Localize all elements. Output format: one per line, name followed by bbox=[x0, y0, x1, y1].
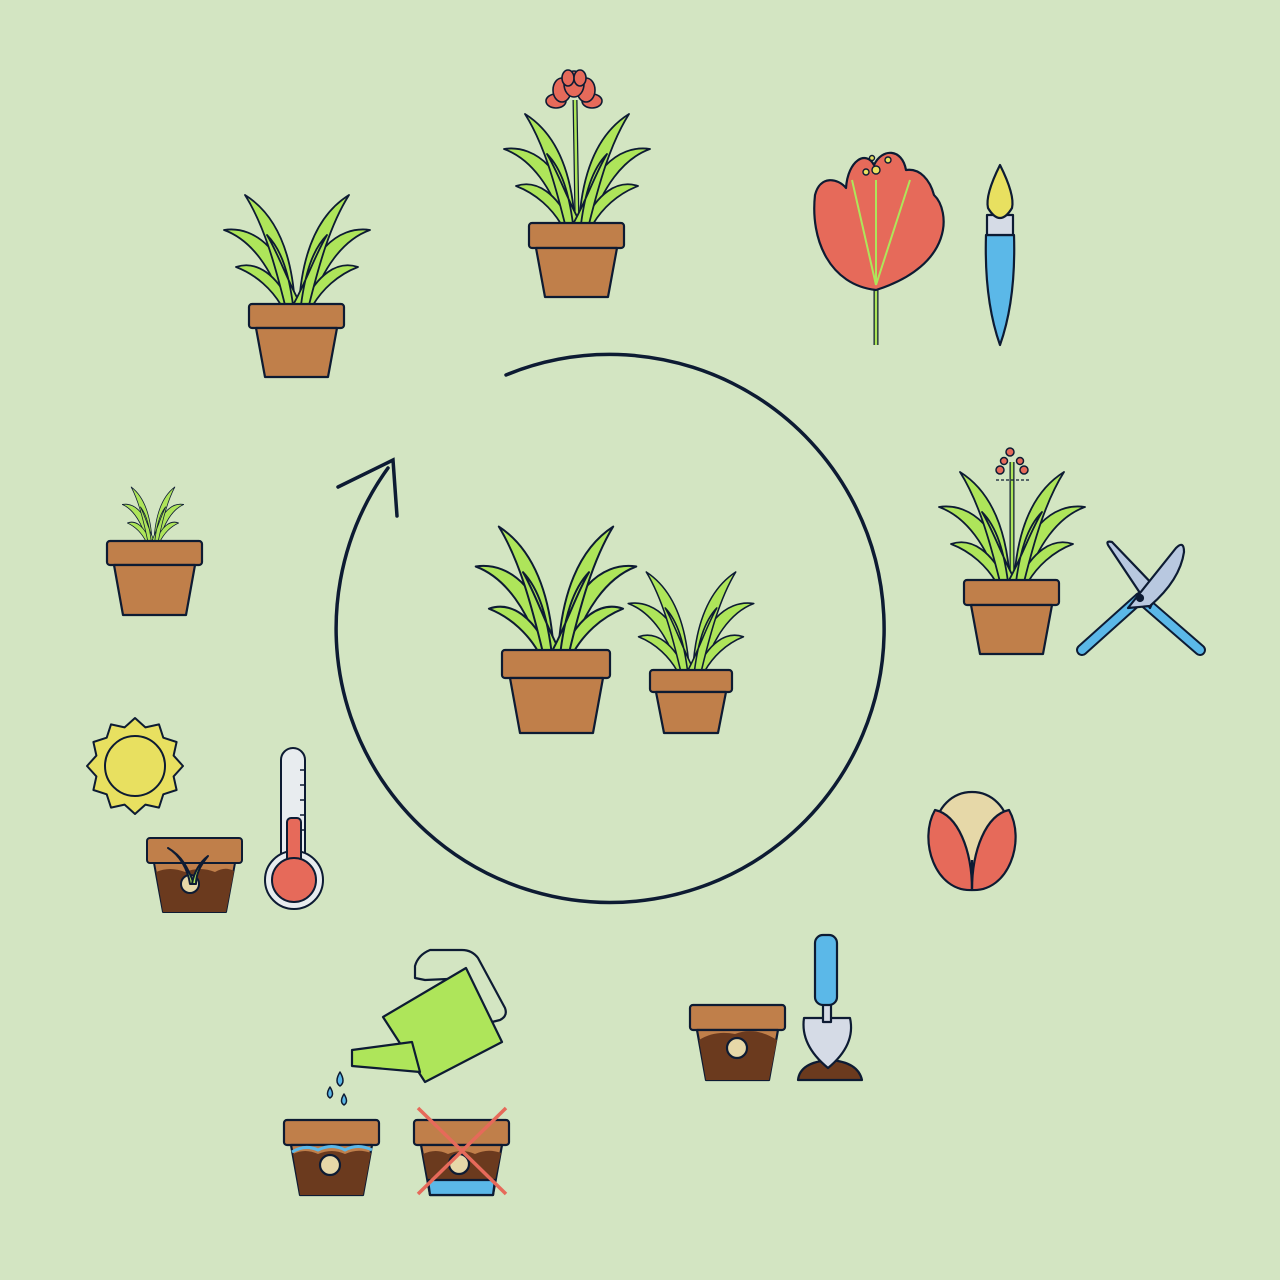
top: flowering potted plant bbox=[504, 70, 650, 297]
icon: water drops bbox=[328, 1072, 346, 1105]
icon: shears bbox=[1082, 542, 1200, 650]
bottom-right: pot with bulb and trowel bbox=[690, 935, 862, 1080]
icon: sun bbox=[87, 718, 183, 814]
icon: seedling pot bbox=[147, 838, 242, 912]
top-left: potted plant bbox=[224, 195, 370, 377]
icon: correctly watered pot bbox=[284, 1120, 379, 1195]
left-bottom: sun, seedling pot, thermometer bbox=[87, 718, 323, 912]
icon: paintbrush bbox=[986, 165, 1014, 345]
center: two potted plants bbox=[476, 527, 754, 733]
top-right: flower anatomy and paintbrush bbox=[814, 153, 1014, 345]
icon: watering can bbox=[352, 950, 506, 1082]
cycle arrow bbox=[336, 354, 884, 902]
icon: trowel bbox=[798, 935, 862, 1080]
bottom: watering can and two pots bbox=[284, 950, 509, 1195]
icon: overwatered pot crossed bbox=[414, 1108, 509, 1195]
left: small sprout pot bbox=[107, 487, 202, 615]
right: flowering plant with shears bbox=[939, 448, 1200, 654]
right: bulb bbox=[928, 792, 1016, 890]
icon: thermometer bbox=[265, 748, 323, 909]
